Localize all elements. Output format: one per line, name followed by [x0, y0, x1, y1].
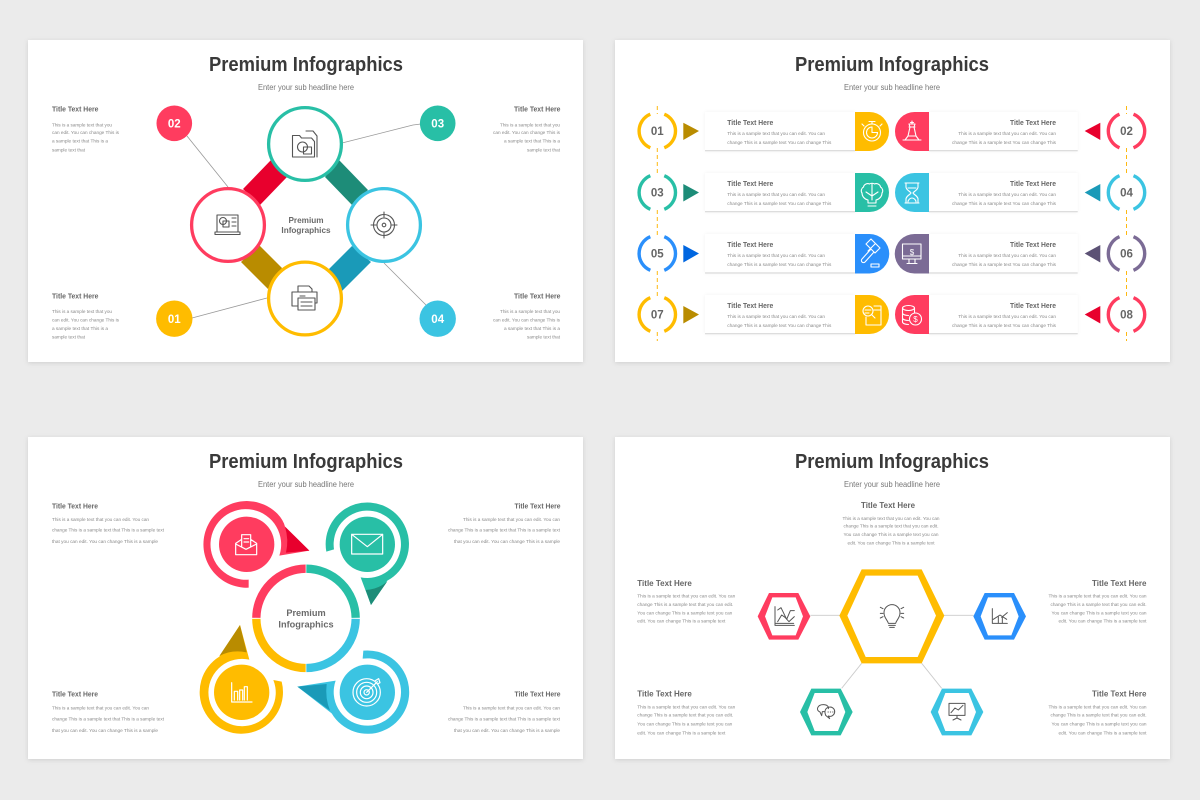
badge 01: 01	[168, 314, 181, 326]
row 04: 04	[1120, 188, 1133, 200]
text block: middle left: edit. You can change This is a sample text	[637, 619, 726, 625]
text block: bottom left: This is a sample text that you can edit. You can	[637, 704, 736, 710]
text block: top center	[842, 500, 940, 547]
text block: top right: Title Text Here	[514, 105, 560, 114]
text block: top right: a sample text that This is a	[504, 139, 560, 145]
row 03	[639, 173, 889, 212]
row 08: $	[913, 315, 918, 324]
row 02	[895, 112, 1145, 151]
connector lines	[187, 124, 427, 318]
heading: Premium Infographics	[209, 53, 403, 76]
text block: top right: sample text that	[527, 147, 561, 153]
text block: bottom left	[637, 689, 736, 737]
row 01: change This is a sample text You can change This	[727, 140, 832, 146]
row 07: change This is a sample text You can change This	[727, 323, 832, 329]
row 06: change This is a sample text You can change This	[952, 262, 1057, 268]
row 06	[895, 234, 1145, 274]
heading: Premium Infographics	[795, 53, 989, 76]
row 08: change This is a sample text You can change This	[952, 323, 1057, 329]
text block: top left: Title Text Here	[52, 105, 98, 114]
row 05: change This is a sample text You can change This	[727, 262, 832, 268]
text block: bottom left: that you can edit. You can change This is a sample	[52, 728, 158, 734]
pod: blue target	[297, 650, 409, 734]
text block: top right: Title Text Here	[514, 502, 560, 510]
heading: Premium Infographics	[209, 450, 403, 473]
hexagon: blue with bar chart	[973, 593, 1026, 640]
hexagon: teal with chat bubbles	[800, 689, 853, 735]
text block: bottom right: change This is a sample text that you can edit.	[1050, 713, 1146, 719]
hexagon: main with bulb	[839, 569, 944, 663]
row 01	[639, 112, 889, 151]
row 08	[895, 295, 1145, 334]
text block: top center: This is a sample text that you can edit. You can	[842, 516, 940, 522]
center label	[281, 216, 331, 235]
row 06: 06	[1120, 248, 1133, 260]
text block: bottom left: sample text that	[52, 335, 86, 341]
connector lines	[810, 615, 974, 688]
text block: bottom left	[52, 690, 165, 734]
text block: top left: This is a sample text that you can edit. You can	[52, 517, 149, 523]
text block: top right: This is a sample text that you	[500, 122, 560, 128]
text block: bottom left: edit. You can change This is a sample text	[637, 731, 726, 737]
row 02: change This is a sample text You can change This	[952, 140, 1057, 146]
row 04: change This is a sample text You can change This	[952, 201, 1057, 207]
text block: top right	[448, 502, 561, 545]
row 02: 02	[1120, 126, 1133, 138]
text block: top center: Title Text Here	[861, 500, 915, 510]
row 01: Title Text Here	[727, 118, 773, 127]
text block: middle right: edit. You can change This is a sample text	[1058, 619, 1147, 625]
hexagon: light blue with presentation	[931, 689, 983, 735]
row 04	[895, 173, 1145, 212]
row 08: 08	[1120, 310, 1133, 322]
text block: top center: edit. You can change This is a sample text	[848, 541, 935, 547]
text block: top right: can edit. You can change This is	[493, 130, 561, 136]
row 01: 01	[651, 126, 664, 138]
text block: bottom right: can edit. You can change This is	[493, 318, 561, 324]
row 07	[639, 295, 889, 334]
pod: teal mail	[326, 502, 409, 605]
circle: top with document icon	[269, 108, 341, 180]
circle: bottom with printer icon	[269, 262, 341, 335]
row 07: Title Text Here	[727, 301, 773, 310]
sub headline: Enter your sub headline here	[258, 479, 354, 489]
row 05: Title Text Here	[727, 240, 773, 249]
text block: bottom left	[52, 291, 120, 341]
text block: top left: This is a sample text that you	[52, 122, 112, 128]
hexagon: pink with line chart	[758, 593, 810, 640]
row 05: 05	[651, 248, 664, 260]
center label: Infographics	[281, 226, 331, 235]
text block: bottom right: This is a sample text that you can edit. You can	[1048, 704, 1147, 710]
text block: middle right: You can change This is a sample text you can	[1052, 610, 1147, 616]
hexagon diagram	[758, 569, 1026, 735]
badge 03	[420, 106, 456, 141]
row 06: This is a sample text that you can edit. You can	[958, 253, 1056, 259]
text block: bottom right: Title Text Here	[514, 291, 560, 300]
center label: Infographics	[278, 620, 334, 630]
center label	[278, 608, 334, 630]
text block: bottom right	[448, 690, 561, 734]
row 07: 07	[651, 310, 664, 322]
badge 02	[156, 106, 192, 141]
badge 02: 02	[168, 118, 181, 130]
text block: bottom left: Title Text Here	[637, 689, 692, 699]
text block: top center: You can change This is a sample text you can	[844, 532, 939, 538]
text block: top right: change This is a sample text that This is a sample text	[448, 528, 561, 534]
row 08: This is a sample text that you can edit. You can	[958, 314, 1056, 320]
central ring	[256, 569, 356, 668]
row 02: This is a sample text that you can edit. You can	[958, 131, 1056, 137]
connector bands	[241, 160, 371, 291]
badge 04	[420, 300, 456, 337]
row 04: This is a sample text that you can edit. You can	[958, 192, 1056, 198]
badge 04: 04	[431, 314, 445, 326]
text block: middle right: This is a sample text that you can edit. You can	[1048, 594, 1147, 600]
sub headline: Enter your sub headline here	[844, 82, 940, 92]
row 03: Title Text Here	[727, 179, 773, 188]
text block: bottom right: This is a sample text that you can edit. You can	[463, 705, 560, 711]
row 04: Title Text Here	[1010, 179, 1056, 188]
text block: middle right: change This is a sample text that you can edit.	[1050, 602, 1146, 608]
text block: bottom left: Title Text Here	[52, 690, 98, 698]
text block: top right: This is a sample text that you can edit. You can	[463, 517, 560, 523]
text block: bottom right: a sample text that This is a	[504, 326, 560, 332]
center label: Premium	[286, 608, 326, 618]
dashed timelines	[657, 106, 1126, 341]
row 01: This is a sample text that you can edit. You can	[727, 131, 825, 137]
panel: circular diamond infographic	[28, 40, 583, 362]
text block: bottom left: change This is a sample text that you can edit.	[637, 713, 733, 719]
text block: middle right: Title Text Here	[1092, 578, 1147, 588]
text block: bottom left: This is a sample text that you	[52, 309, 112, 315]
text block: bottom left: This is a sample text that you can edit. You can	[52, 705, 149, 711]
text block: bottom right: You can change This is a sample text you can	[1052, 722, 1147, 728]
text block: top right	[493, 105, 561, 153]
text block: top right: that you can edit. You can change This is a sample	[454, 539, 560, 545]
center label: Premium	[288, 216, 324, 225]
row 03: 03	[651, 188, 664, 200]
row 03: This is a sample text that you can edit. You can	[727, 192, 825, 198]
panel: hexagon infographic	[615, 437, 1170, 759]
panel: pods around a central ring	[28, 437, 583, 759]
badge 01	[156, 300, 192, 337]
row 08: Title Text Here	[1010, 301, 1056, 310]
sub headline: Enter your sub headline here	[844, 479, 940, 489]
pod: pink envelope	[203, 501, 309, 588]
sub headline: Enter your sub headline here	[258, 82, 354, 92]
text block: bottom left: Title Text Here	[52, 291, 98, 300]
text block: top left: a sample text that This is a	[52, 139, 108, 145]
row 02: Title Text Here	[1010, 118, 1056, 127]
heading: Premium Infographics	[795, 450, 989, 473]
row 05: This is a sample text that you can edit. You can	[727, 253, 825, 259]
text block: top left: that you can edit. You can change This is a sample	[52, 539, 158, 545]
text block: top left: change This is a sample text that This is a sample text	[52, 528, 165, 534]
text block: bottom left: can edit. You can change This is	[52, 318, 120, 324]
text block: middle left: This is a sample text that you can edit. You can	[637, 594, 736, 600]
text block: bottom left: a sample text that This is a	[52, 326, 108, 332]
text block: bottom right: Title Text Here	[1092, 689, 1147, 699]
text block: bottom right: that you can edit. You can change This is a sample	[454, 728, 560, 734]
text block: bottom right	[493, 291, 561, 341]
panel: numbered rows infographic	[615, 40, 1170, 362]
text block: bottom right	[1048, 689, 1147, 737]
text block: top left: can edit. You can change This is	[52, 130, 120, 136]
text block: bottom right: Title Text Here	[514, 690, 560, 698]
row 06: Title Text Here	[1010, 240, 1056, 249]
text block: bottom right: This is a sample text that you	[500, 309, 560, 315]
text block: middle left	[637, 578, 736, 625]
circle: right with target icon	[348, 189, 420, 261]
text block: bottom left: change This is a sample text that This is a sample text	[52, 716, 165, 722]
text block: middle left: Title Text Here	[637, 578, 692, 588]
row 07: This is a sample text that you can edit. You can	[727, 314, 825, 320]
row 06: $	[910, 248, 915, 257]
text block: bottom right: edit. You can change This is a sample text	[1058, 731, 1147, 737]
text block: middle left: change This is a sample text that you can edit.	[637, 602, 733, 608]
text block: bottom right: sample text that	[527, 335, 561, 341]
text block: top left: sample text that	[52, 147, 86, 153]
text block: top center: change This is a sample text that you can edit.	[844, 524, 938, 530]
pod: yellow chart	[200, 625, 283, 734]
row 05	[639, 234, 889, 274]
pods and ring diagram	[200, 501, 409, 734]
text block: bottom left: You can change This is a sample text you can	[637, 722, 733, 728]
text block: top left: Title Text Here	[52, 502, 98, 510]
text block: bottom right: change This is a sample text that This is a sample text	[448, 716, 561, 722]
text block: top left	[52, 502, 165, 545]
text block: top left	[52, 105, 120, 153]
text block: middle left: You can change This is a sample text you can	[637, 610, 733, 616]
row 03: change This is a sample text You can change This	[727, 201, 832, 207]
badge 03: 03	[431, 118, 444, 130]
text block: middle right	[1048, 578, 1147, 625]
circle: left with laptop icon	[192, 189, 264, 261]
